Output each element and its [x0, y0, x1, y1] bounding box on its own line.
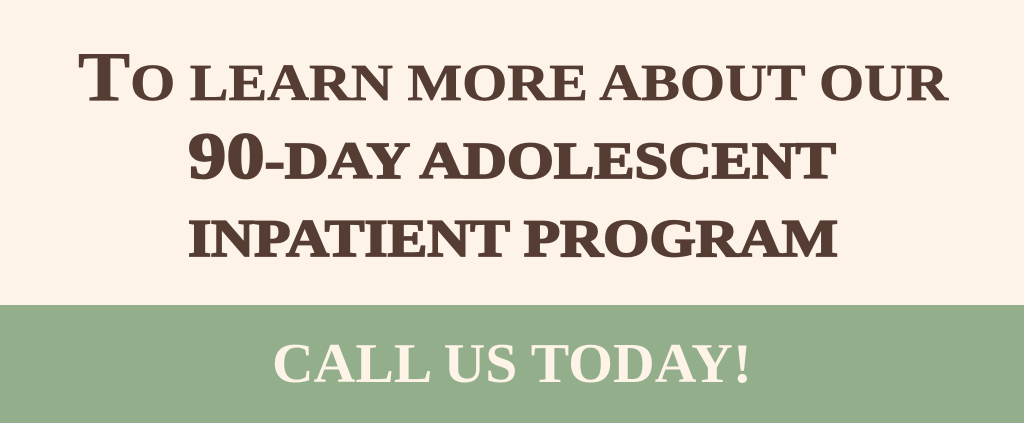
- heading: intro line: TO LEARN MORE ABOUT OUR: [78, 39, 950, 116]
- heading: program name line one: 90-DAY ADOLESCENT: [188, 120, 836, 193]
- panel: cream background: [0, 0, 1024, 305]
- call to action text: CALL US TODAY!: [272, 333, 752, 395]
- heading: program name line two: INPATIENT PROGRAM: [188, 210, 838, 268]
- panel: green call-to-action band: [0, 305, 1024, 423]
